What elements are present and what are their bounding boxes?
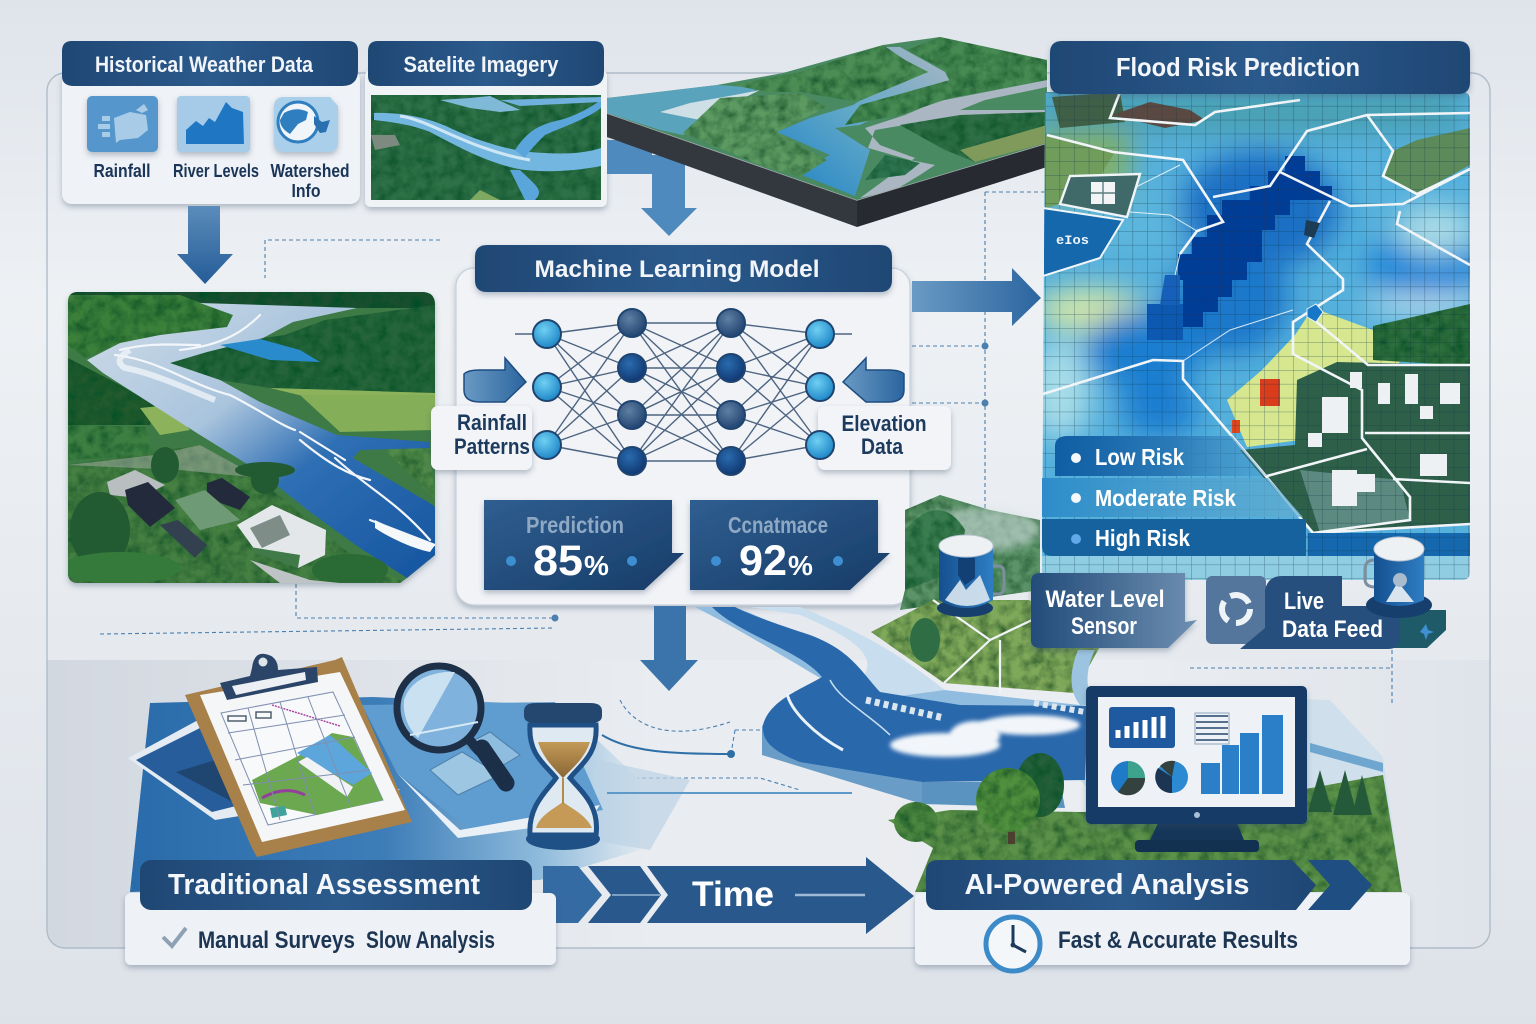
heading: AI-powered analysis: AI-Powered Analysis: [964, 869, 1250, 901]
trees: [894, 753, 1064, 844]
heading: historical weather data: Historical Weather Data: [95, 52, 314, 77]
deep flood zone: [1178, 156, 1332, 327]
text: manual surveys: Manual Surveys: [198, 927, 355, 954]
grid overlay: [1042, 92, 1470, 580]
pale strip under legend: [1042, 556, 1470, 580]
hourglass: [524, 703, 602, 850]
callout: water level sensor: Sensor: [1071, 613, 1137, 640]
low-risk green and yellow zone: [1227, 308, 1400, 447]
arrow: weather data down: [177, 206, 233, 284]
arrow: rainfall input: [464, 358, 526, 402]
icon: watershed info: [274, 97, 338, 152]
panel: flood risk prediction map: eIos: [1056, 233, 1089, 248]
node: output bottom: [806, 431, 834, 459]
stat card: confidence: [690, 500, 890, 590]
icon: river levels: [177, 96, 250, 152]
panel: satellite imagery: [365, 41, 607, 207]
panel: forest behind sensors: [900, 495, 1040, 610]
legend: low risk: Low Risk: [1095, 444, 1184, 470]
time arrow: Time: [692, 875, 774, 914]
panel: traditional assessment caption: [125, 860, 556, 965]
callout: elevation data: Elevation: [842, 411, 926, 436]
green field: [871, 600, 1102, 693]
satellite image: [371, 95, 601, 200]
time arrow: [543, 857, 914, 934]
grid over lower strips: [1042, 533, 1470, 580]
panel: traditional assessment illustration: [128, 654, 690, 892]
label: watershed info: Watershed: [270, 161, 350, 181]
sensor markers on map: [1304, 220, 1320, 238]
heading: AI-powered analysis: [926, 860, 1372, 910]
callout: rainfall patterns: Patterns: [454, 434, 530, 459]
river: [695, 607, 1088, 808]
heading: historical weather data: [62, 41, 358, 86]
stat card: prediction: 85: [533, 537, 583, 585]
marker dot: [727, 750, 735, 758]
stat card: confidence: Ccnatmace: [728, 512, 828, 538]
icon: water sensor cup left: [937, 535, 1004, 617]
connector lines: [100, 192, 1392, 790]
pine trees: [1308, 770, 1372, 815]
line: ground rule: [607, 792, 852, 794]
stat card: prediction: %: [584, 550, 609, 581]
3D terrain block: [600, 30, 1050, 227]
label: river levels: River Levels: [173, 161, 259, 181]
arrow: satellite down: [607, 140, 697, 236]
heading: traditional assessment: [140, 860, 532, 910]
callout: live data feed: Live: [1284, 588, 1324, 615]
base map sheet: [130, 697, 640, 892]
heading: flood risk prediction: [1050, 41, 1470, 94]
panel: historical weather data: [62, 41, 360, 204]
label: watershed info second line: Info: [292, 181, 320, 201]
callout: live data feed: Data Feed: [1282, 616, 1383, 643]
stat card: confidence: 92: [739, 537, 787, 585]
panel: AI analysis landscape: [695, 600, 1402, 892]
grassland foreground: [888, 775, 1402, 892]
clipboard: [185, 654, 412, 857]
legend: high risk: High Risk: [1095, 525, 1190, 551]
arrow: elevation input: [843, 358, 904, 402]
heading: machine learning model: Machine Learning Model: [534, 256, 820, 283]
photo: river landscape: [60, 292, 445, 586]
legend: moderate risk: [1042, 478, 1303, 517]
callout: live data feed: [1206, 576, 1446, 649]
legend: high risk: [1042, 519, 1306, 556]
icon: clock: [986, 917, 1040, 971]
roads and boundaries: [1043, 92, 1470, 533]
blue strip lower right: [1308, 533, 1470, 556]
stat card: confidence: %: [788, 550, 813, 581]
lower band background: [47, 660, 1490, 948]
heading: machine learning model: [475, 245, 892, 292]
line: hourglass to timeline: [602, 735, 731, 754]
neural network: [515, 309, 852, 475]
panel: flood risk prediction map: [1030, 41, 1485, 580]
node: input bottom: [533, 431, 561, 459]
dark plot with grid icon: [1060, 174, 1140, 217]
stat card: prediction: [484, 500, 684, 590]
callout: water level sensor: Water Level: [1046, 586, 1164, 613]
building blocks: [1308, 372, 1460, 506]
stat card: prediction: Prediction: [526, 512, 624, 538]
magnifying glass: [397, 666, 506, 783]
heading: satellite imagery: [368, 41, 604, 86]
callout: elevation data: [818, 406, 951, 470]
heading: flood risk prediction: Flood Risk Prediction: [1116, 52, 1360, 82]
arrow: model to flood map: [912, 268, 1041, 326]
panel: AI-powered analysis caption: [915, 860, 1410, 971]
arrow: model down: [640, 606, 698, 691]
callout: rainfall patterns: Rainfall: [457, 410, 527, 435]
callout: rainfall patterns: [431, 406, 532, 470]
legend: low risk: [1055, 436, 1267, 476]
legend: moderate risk: Moderate Risk: [1095, 485, 1236, 511]
text: slow analysis: Slow Analysis: [366, 927, 495, 954]
callout: water level sensor: [1031, 573, 1197, 648]
icon: rainfall: [87, 96, 158, 152]
monitor dashboard: [1086, 686, 1307, 852]
heading: satellite imagery: Satelite Imagery: [404, 52, 559, 77]
icon: water sensor cup right: [1365, 537, 1432, 618]
text: fast and accurate results: Fast & Accurate Results: [1058, 927, 1298, 954]
label: rainfall: Rainfall: [94, 161, 150, 181]
callout: elevation data: Data: [861, 434, 904, 459]
panel: machine learning model: [431, 245, 951, 605]
icon: check mark: [163, 928, 186, 946]
heading: traditional assessment: Traditional Assessment: [168, 869, 480, 901]
